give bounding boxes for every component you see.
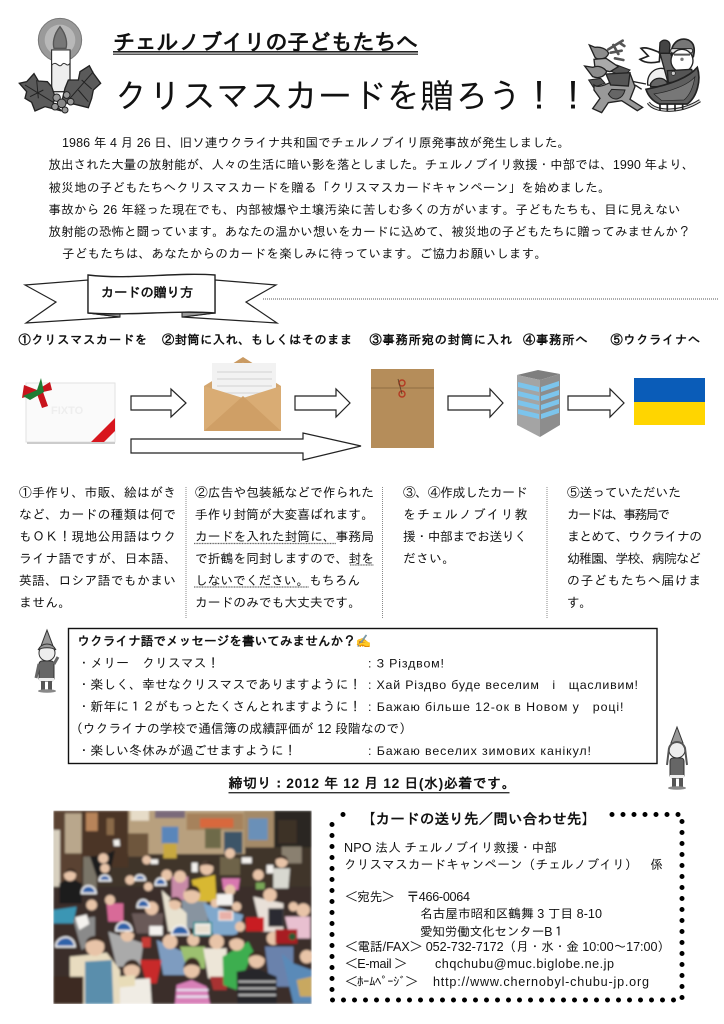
ukrainian phrases: : Бажаю веселих зимових канікул!	[368, 744, 591, 758]
icon: open envelope with letter	[204, 357, 281, 431]
arrow: office to ukraine	[568, 389, 624, 417]
dotted border	[332, 814, 682, 1000]
japanese phrases: ・新年に１２がもっとたくさんとれますように！	[78, 699, 362, 714]
ukrainian phrases: : Бажаю більше 12-ок в Новом у році!	[368, 700, 624, 714]
ukrainian phrases	[368, 656, 638, 758]
intro text: 子どもたちは、あなたからのカードを楽しみに待っています。ご協力お願いします。	[62, 247, 547, 261]
icon: christmas card: FIXTO	[51, 405, 84, 417]
arrow: card directly to office envelope	[131, 433, 361, 460]
icon: ukraine flag	[634, 378, 705, 425]
column: envelopes: ②広告や包装紙などで作られた	[195, 485, 374, 500]
main title: クリスマスカードを贈ろう！！	[114, 78, 590, 116]
column: card types: ライナ語ですが、日本語、	[19, 551, 177, 566]
column: card types: 英語、ロシア語でもかまい	[19, 573, 176, 588]
column: delivery to ukraine: す。	[567, 595, 592, 610]
intro text: 放出された大量の放射能が、人々の生活に暗い影を落としました。チェルノブイリ救援・中部では、1990 年より、	[48, 158, 694, 172]
column: sending to office: 援・中部までお送りく	[403, 529, 527, 544]
column: delivery to ukraine: の子どもたちへ届けま	[567, 573, 701, 588]
ribbon heading: how to send	[25, 274, 277, 323]
icon: santa sleigh with reindeer	[585, 39, 700, 113]
arrow: envelope to office envelope	[295, 389, 350, 417]
column: envelopes: カードを入れた封筒に、事務局	[195, 529, 374, 544]
step labels: ④事務所へ	[523, 333, 588, 347]
intro text: 放射能の恐怖と闘っています。あなたの温かい想いをカードに込めて、被災地の子どもたちに贈ってみませんか？	[48, 225, 690, 239]
address text: ＜E-mail ＞	[345, 957, 407, 971]
step labels: ③事務所宛の封筒に入れ	[370, 333, 512, 347]
icon: christmas card	[22, 378, 115, 444]
ukrainian phrases: : З Різдвом!	[368, 656, 444, 670]
column: sending to office: ださい。	[403, 551, 455, 566]
panel: contact address	[332, 811, 682, 1000]
japanese phrases: ・メリー クリスマス！	[78, 656, 220, 670]
step labels	[18, 333, 700, 347]
address text: http://www.chernobyl-chubu-jp.org	[433, 975, 649, 989]
address text: 名古屋市昭和区鶴舞 3 丁目 8-10	[420, 907, 602, 921]
ukrainian phrases: : Хай Різдво буде веселим і щасливим!	[368, 678, 638, 692]
arrow: office envelope to office	[448, 389, 503, 417]
panel heading: ウクライナ語でメッセージを書いてみませんか？✍	[78, 634, 372, 648]
deadline: 締切り：2012 年 12 月 12 日(水)必着です。	[228, 775, 516, 791]
intro text: 被災地の子どもたちへクリスマスカードを贈る「クリスマスカードキャンペーン」を始めました。	[48, 181, 610, 195]
column: card types: ません。	[19, 595, 71, 610]
address text: ＜宛先＞ 〒466-0064	[345, 890, 470, 904]
japanese phrases	[70, 656, 412, 758]
address text: chqchubu@muc.biglobe.ne.jp	[435, 957, 614, 971]
column: card types	[19, 485, 177, 610]
column: delivery to ukraine: カードは、事務局で	[567, 507, 670, 522]
intro text: 1986 年 4 月 26 日、旧ソ連ウクライナ共和国でチェルノブイリ原発事故が発生しました。	[62, 136, 570, 150]
column: envelopes: 手作り封筒が大変喜ばれます。	[195, 507, 374, 522]
address text: ＜ﾎｰﾑﾍﾟｰｼﾞ＞	[345, 975, 418, 989]
icon: office building	[517, 370, 560, 437]
column: sending to office	[403, 485, 528, 566]
column: delivery to ukraine	[567, 485, 702, 610]
column: envelopes: で折鶴を同封しますので、封を	[195, 551, 374, 566]
column: envelopes: カードのみでも大丈夫です。	[195, 595, 361, 610]
column: envelopes	[194, 485, 374, 610]
address text: クリスマスカードキャンペーン（チェルノブイリ） 係	[344, 858, 663, 872]
address text	[344, 841, 670, 989]
intro text: 事故から 26 年経った現在でも、内部被爆や土壌汚染に苦しむ多くの方がいます。子どもたちも、目に見えない	[48, 203, 680, 217]
column: card types: など、カードの種類は何で	[19, 507, 176, 522]
column: card types: もＯＫ！現地公用語はウク	[19, 529, 176, 544]
japanese phrases: ・楽しい冬休みが過ごせますように！	[78, 743, 296, 758]
panel: contact address: 【カードの送り先／問い合わせ先】	[361, 811, 596, 828]
ribbon heading: how to send: カードの贈り方	[101, 285, 193, 300]
column: sending to office: をチェルノブイリ教	[403, 507, 528, 522]
address text: ＜電話/FAX＞ 052-732-7172（月・水・金 10:00～17:00）	[345, 940, 670, 954]
column: delivery to ukraine: まとめて、ウクライナの	[567, 529, 702, 544]
column: sending to office: ③、④作成したカード	[403, 485, 528, 500]
step labels: ②封筒に入れ、もしくはそのまま	[162, 333, 352, 347]
column: card types: ①手作り、市販、絵はがき	[19, 485, 176, 500]
arrow: card to envelope	[131, 389, 186, 417]
icon: gnome child left	[36, 630, 58, 693]
column: delivery to ukraine: 幼稚園、学校、病院など	[567, 551, 701, 566]
panel: ukrainian messages	[68, 628, 657, 764]
subtitle: チェルノブイリの子どもたちへ	[113, 30, 418, 55]
photo: children holding christmas cards	[53, 811, 313, 1004]
address text: 愛知労働文化センターB１	[420, 925, 565, 939]
column: envelopes: しないでください。もちろん	[195, 573, 360, 588]
step labels: ⑤ウクライナへ	[610, 333, 700, 347]
intro text	[48, 136, 694, 261]
column: delivery to ukraine: ⑤送っていただいた	[567, 485, 681, 500]
icon: gnome child right	[667, 727, 687, 790]
address text: NPO 法人 チェルノブイリ救援・中部	[344, 841, 557, 855]
icon: brown office envelope	[371, 369, 434, 448]
step labels: ①クリスマスカードを	[18, 333, 147, 347]
japanese phrases: （ウクライナの学校で通信簿の成績評価が 12 段階なので）	[70, 721, 412, 736]
icon: candle with holly	[19, 18, 101, 113]
japanese phrases: ・楽しく、幸せなクリスマスでありますように！	[78, 677, 362, 692]
